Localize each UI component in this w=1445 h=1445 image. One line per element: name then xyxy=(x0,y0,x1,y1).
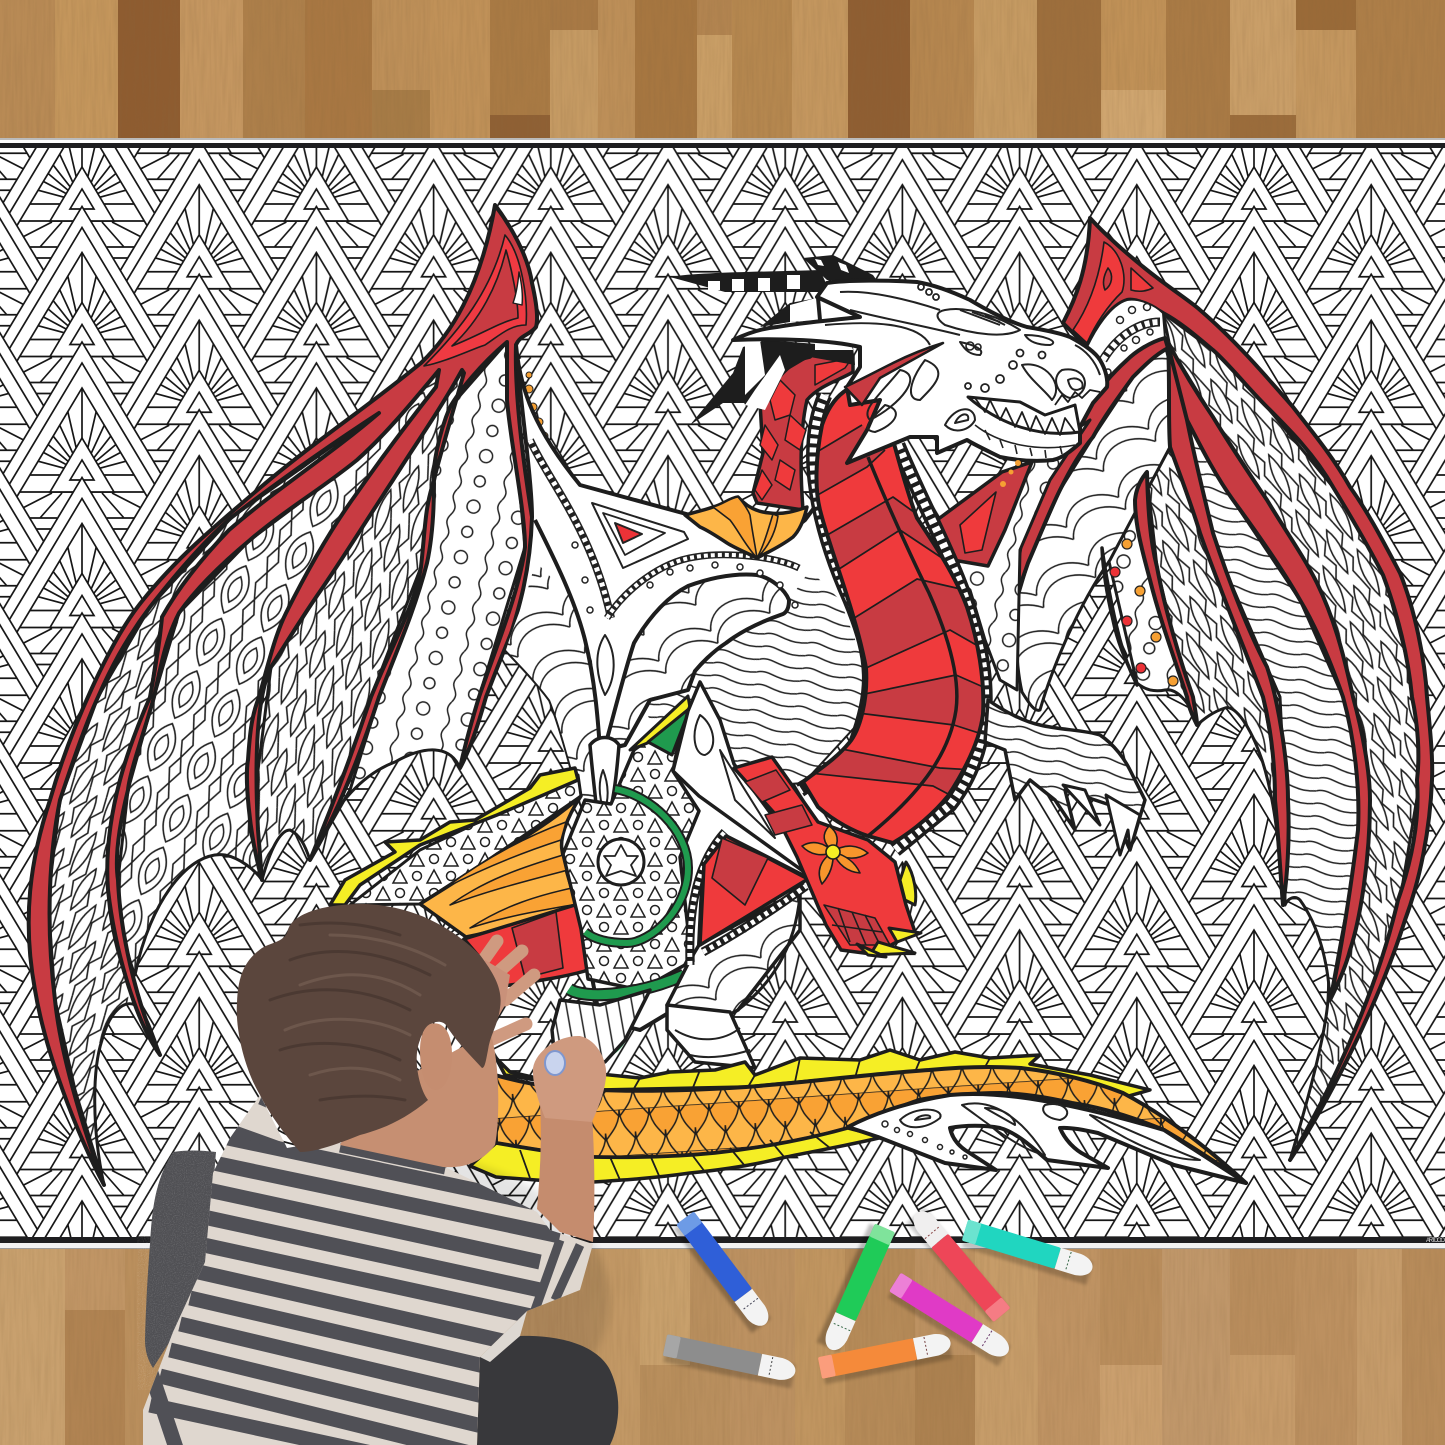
hair xyxy=(237,904,501,1152)
yellow spike strip xyxy=(330,768,578,905)
left wing bones xyxy=(29,205,537,1185)
white undershirt xyxy=(480,1311,527,1362)
right wing second bone xyxy=(1168,342,1370,1000)
far hand palm xyxy=(478,960,510,1035)
marker: green xyxy=(816,1221,895,1354)
tail white band and yellow spikes upper xyxy=(330,768,598,986)
far hand fingers xyxy=(485,941,534,1040)
teeth xyxy=(975,398,1075,435)
patch orange dots xyxy=(1000,470,1014,487)
belly right ladder rungs xyxy=(895,445,985,850)
arm ladder rungs xyxy=(530,440,611,618)
crest strip ladder xyxy=(1103,322,1160,360)
dots on crest strip xyxy=(1105,304,1153,375)
sun medallion xyxy=(598,839,644,885)
neck scales xyxy=(755,358,852,500)
right wing top red crest and outer bone xyxy=(1063,218,1432,1160)
belly outline xyxy=(803,380,983,843)
arm inner triangle with red xyxy=(592,503,688,568)
right wing third bone xyxy=(1168,345,1289,905)
marker: teal xyxy=(960,1219,1095,1285)
flower xyxy=(802,826,868,884)
arm Y thick contour xyxy=(604,575,789,750)
white right claw arm xyxy=(985,700,1145,855)
right wing fifth bone xyxy=(1102,548,1137,685)
dragon torso and wing arm xyxy=(506,345,866,1030)
left wing membranes xyxy=(48,342,525,1185)
dragon head and horns xyxy=(670,255,1107,466)
shirt xyxy=(130,1090,610,1445)
claw tips xyxy=(1063,785,1140,855)
right knee dark trousers xyxy=(477,1336,618,1445)
white torso base xyxy=(506,345,866,1030)
tail tip dots xyxy=(882,1121,967,1159)
small green arc xyxy=(606,1033,627,1056)
dragon red fore-arm and hand xyxy=(673,682,921,957)
eye shapes on blade xyxy=(695,715,775,838)
marker: gray xyxy=(662,1334,797,1389)
bare arm xyxy=(537,1105,594,1242)
red thigh dark band xyxy=(712,838,768,905)
red sleeve xyxy=(734,757,915,955)
poster paper with triangle pattern xyxy=(0,138,1445,1249)
hand dark knuckles xyxy=(824,905,890,945)
green arc outline xyxy=(585,789,688,943)
red belly xyxy=(800,380,990,850)
mandala thigh xyxy=(563,696,699,1056)
lower drip xyxy=(590,738,619,843)
red wing patch behind neck xyxy=(937,420,1090,690)
left wing tip dark centre xyxy=(452,250,518,346)
marker: orange xyxy=(818,1331,954,1385)
crest highlight xyxy=(1073,242,1124,343)
belly plate lines xyxy=(520,1132,830,1180)
arm thick edge xyxy=(535,520,600,750)
red cheek wedge xyxy=(845,343,943,405)
eye xyxy=(966,342,981,350)
region left of drip with arcs xyxy=(506,561,600,843)
thigh stripes xyxy=(667,890,800,1020)
arm dot ladder xyxy=(530,440,611,618)
orange fin xyxy=(420,796,581,937)
tongue tip dots xyxy=(1015,460,1021,466)
belly band lines xyxy=(816,424,981,794)
green yellow fin piece xyxy=(630,696,690,750)
knuckle lines xyxy=(832,908,882,945)
red scaled neck xyxy=(753,352,853,510)
crest inner teardrop xyxy=(1104,268,1112,290)
marker: blue xyxy=(672,1211,774,1334)
yellow top spikes xyxy=(496,1050,1160,1120)
belly dark bands xyxy=(816,424,982,835)
dots row under collar xyxy=(572,542,798,613)
dragon tail xyxy=(470,1050,1246,1183)
marker: red xyxy=(906,1206,1010,1324)
knee speckle xyxy=(145,1150,216,1368)
white blade over arm xyxy=(673,682,814,879)
ear xyxy=(420,1023,452,1090)
torso chest swirl xyxy=(630,570,866,787)
drip teardrops xyxy=(597,635,614,812)
head dots xyxy=(918,284,1046,392)
small red triangle xyxy=(615,523,642,543)
orange scaled body xyxy=(495,1067,1246,1183)
left wing tip white slit xyxy=(513,272,522,305)
small print brand mark: ARTDOO xyxy=(1426,1238,1445,1244)
head main shape xyxy=(733,281,1107,463)
orange collar xyxy=(685,497,807,558)
green fin piece xyxy=(648,708,690,755)
orange dots on arm xyxy=(525,372,556,454)
red band xyxy=(464,905,598,986)
dotted collar ladder xyxy=(607,555,799,618)
lower green arc xyxy=(569,975,684,995)
sleeve dark chevrons xyxy=(745,770,812,835)
shin ladder edge xyxy=(690,832,725,965)
bottom wood floor xyxy=(0,1245,1445,1445)
red thigh xyxy=(700,836,808,945)
fin stripes xyxy=(445,822,577,928)
yellow claws xyxy=(857,862,921,957)
thigh under ladder rungs xyxy=(703,886,806,952)
right wing orange and red dots xyxy=(1110,539,1178,686)
boy colouring the poster xyxy=(130,904,618,1445)
long ladder to lower leg xyxy=(738,895,800,1010)
marker: pink xyxy=(886,1273,1014,1367)
tail tip details xyxy=(900,1103,1200,1160)
lower green arc outline xyxy=(569,975,684,995)
head contours xyxy=(825,292,1100,432)
crest inner triangle xyxy=(1131,268,1153,291)
upper teeth xyxy=(1055,390,1100,405)
top spike segment lines xyxy=(632,1058,990,1092)
shin ladder rungs xyxy=(690,832,725,965)
right wing arm bone xyxy=(1017,338,1168,595)
dragon left wing xyxy=(29,205,556,1185)
dragon lower legs xyxy=(552,832,808,1068)
upper horn xyxy=(803,255,880,285)
fist xyxy=(533,1036,606,1122)
belly right ladder border xyxy=(895,445,985,850)
marker cap in fist xyxy=(545,1051,565,1075)
scale band xyxy=(350,775,581,905)
boy shadow xyxy=(150,1150,610,1445)
lower leg curves xyxy=(675,1028,750,1057)
belly body xyxy=(803,380,983,843)
red band dark segment xyxy=(512,912,563,978)
right wing membranes xyxy=(1107,313,1420,1160)
top arch black xyxy=(760,298,860,327)
left knee dark trousers xyxy=(145,1150,216,1368)
left wing tip highlight xyxy=(424,235,526,366)
mouth xyxy=(968,397,1080,433)
hair strands xyxy=(270,923,445,1100)
white lower leg xyxy=(667,1005,755,1068)
jaw plate lines xyxy=(975,425,1075,458)
jaw lower fin xyxy=(945,409,975,430)
right wing arm membrane xyxy=(1016,345,1185,710)
patch light inner xyxy=(960,492,996,553)
top wood floor xyxy=(0,0,1445,140)
dotted crest strip xyxy=(1087,300,1165,392)
inner triangle contour xyxy=(603,513,665,555)
dragon right wing xyxy=(1016,218,1432,1160)
neck and face xyxy=(340,1032,498,1167)
black white frill xyxy=(690,340,855,425)
white tail tip xyxy=(848,1094,1246,1183)
right wing fourth bone xyxy=(1135,472,1197,725)
striped horn xyxy=(670,270,830,292)
yellow belly plates xyxy=(470,1128,883,1182)
belly left ladder rungs xyxy=(800,395,869,790)
collar ladder rungs xyxy=(607,555,799,618)
left lower ribbed leg xyxy=(552,990,650,1062)
crest strip rungs xyxy=(1103,322,1160,360)
belly central vein xyxy=(868,457,957,836)
green arc xyxy=(585,789,688,943)
collar segments xyxy=(713,497,778,558)
belly left ladder border xyxy=(800,395,869,790)
thigh under ladder xyxy=(703,886,806,952)
